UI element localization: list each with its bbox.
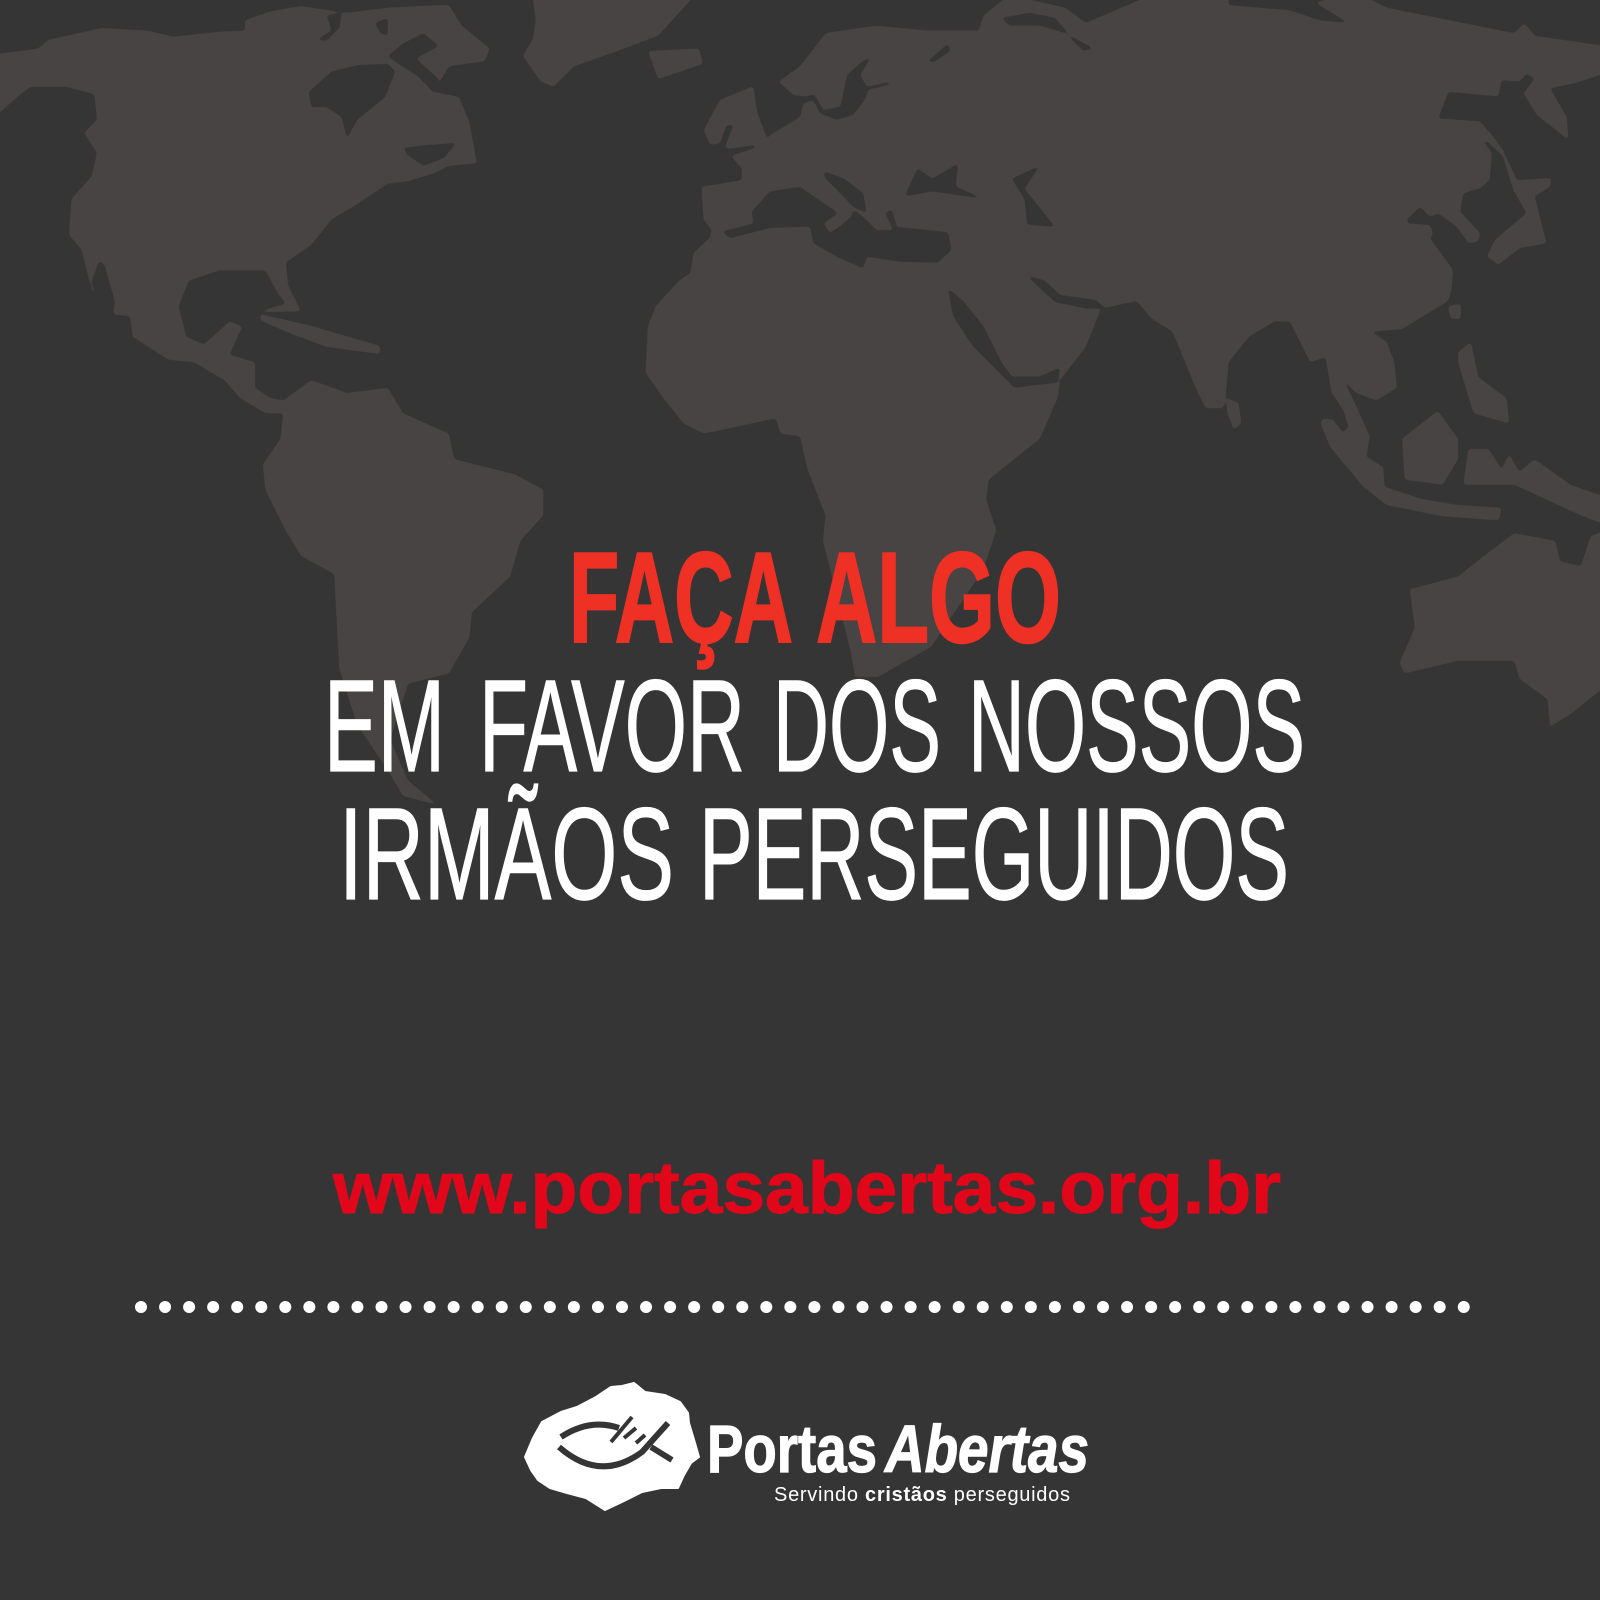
headline: white line 1: FAVOR <box>479 652 745 799</box>
headline: red line: FAÇA <box>569 526 793 670</box>
map: land masses <box>645 0 1600 727</box>
logo wordmark: Abertas: Abertas <box>883 1412 1089 1487</box>
map: american water details <box>92 13 457 344</box>
headline: white line 1: NOSSOS <box>968 652 1305 799</box>
headline: white line 1: DOS <box>773 652 941 799</box>
map: americas and atlantic islands <box>0 0 709 805</box>
headline: white line 2 <box>339 780 1289 927</box>
logo tagline: Servindo cristãos perseguidos <box>774 1484 1070 1506</box>
headline: white line 1: EM <box>324 652 445 799</box>
headline: white line 2: IRMÃOS <box>339 780 674 927</box>
logo wordmark: Portas: Portas <box>707 1412 877 1487</box>
map: inland seas <box>720 13 1106 388</box>
headline <box>324 526 1305 927</box>
headline: red line: ALGO <box>816 526 1061 670</box>
map: eurasia, africa, australia <box>645 0 1600 727</box>
icon: stone with fish <box>525 1383 699 1510</box>
headline: white line 1 <box>324 652 1305 799</box>
logo: Portas Abertas <box>525 1383 1089 1510</box>
website url: www.portasabertas.org.br <box>332 1148 1281 1229</box>
dotted divider <box>141 1301 1466 1313</box>
